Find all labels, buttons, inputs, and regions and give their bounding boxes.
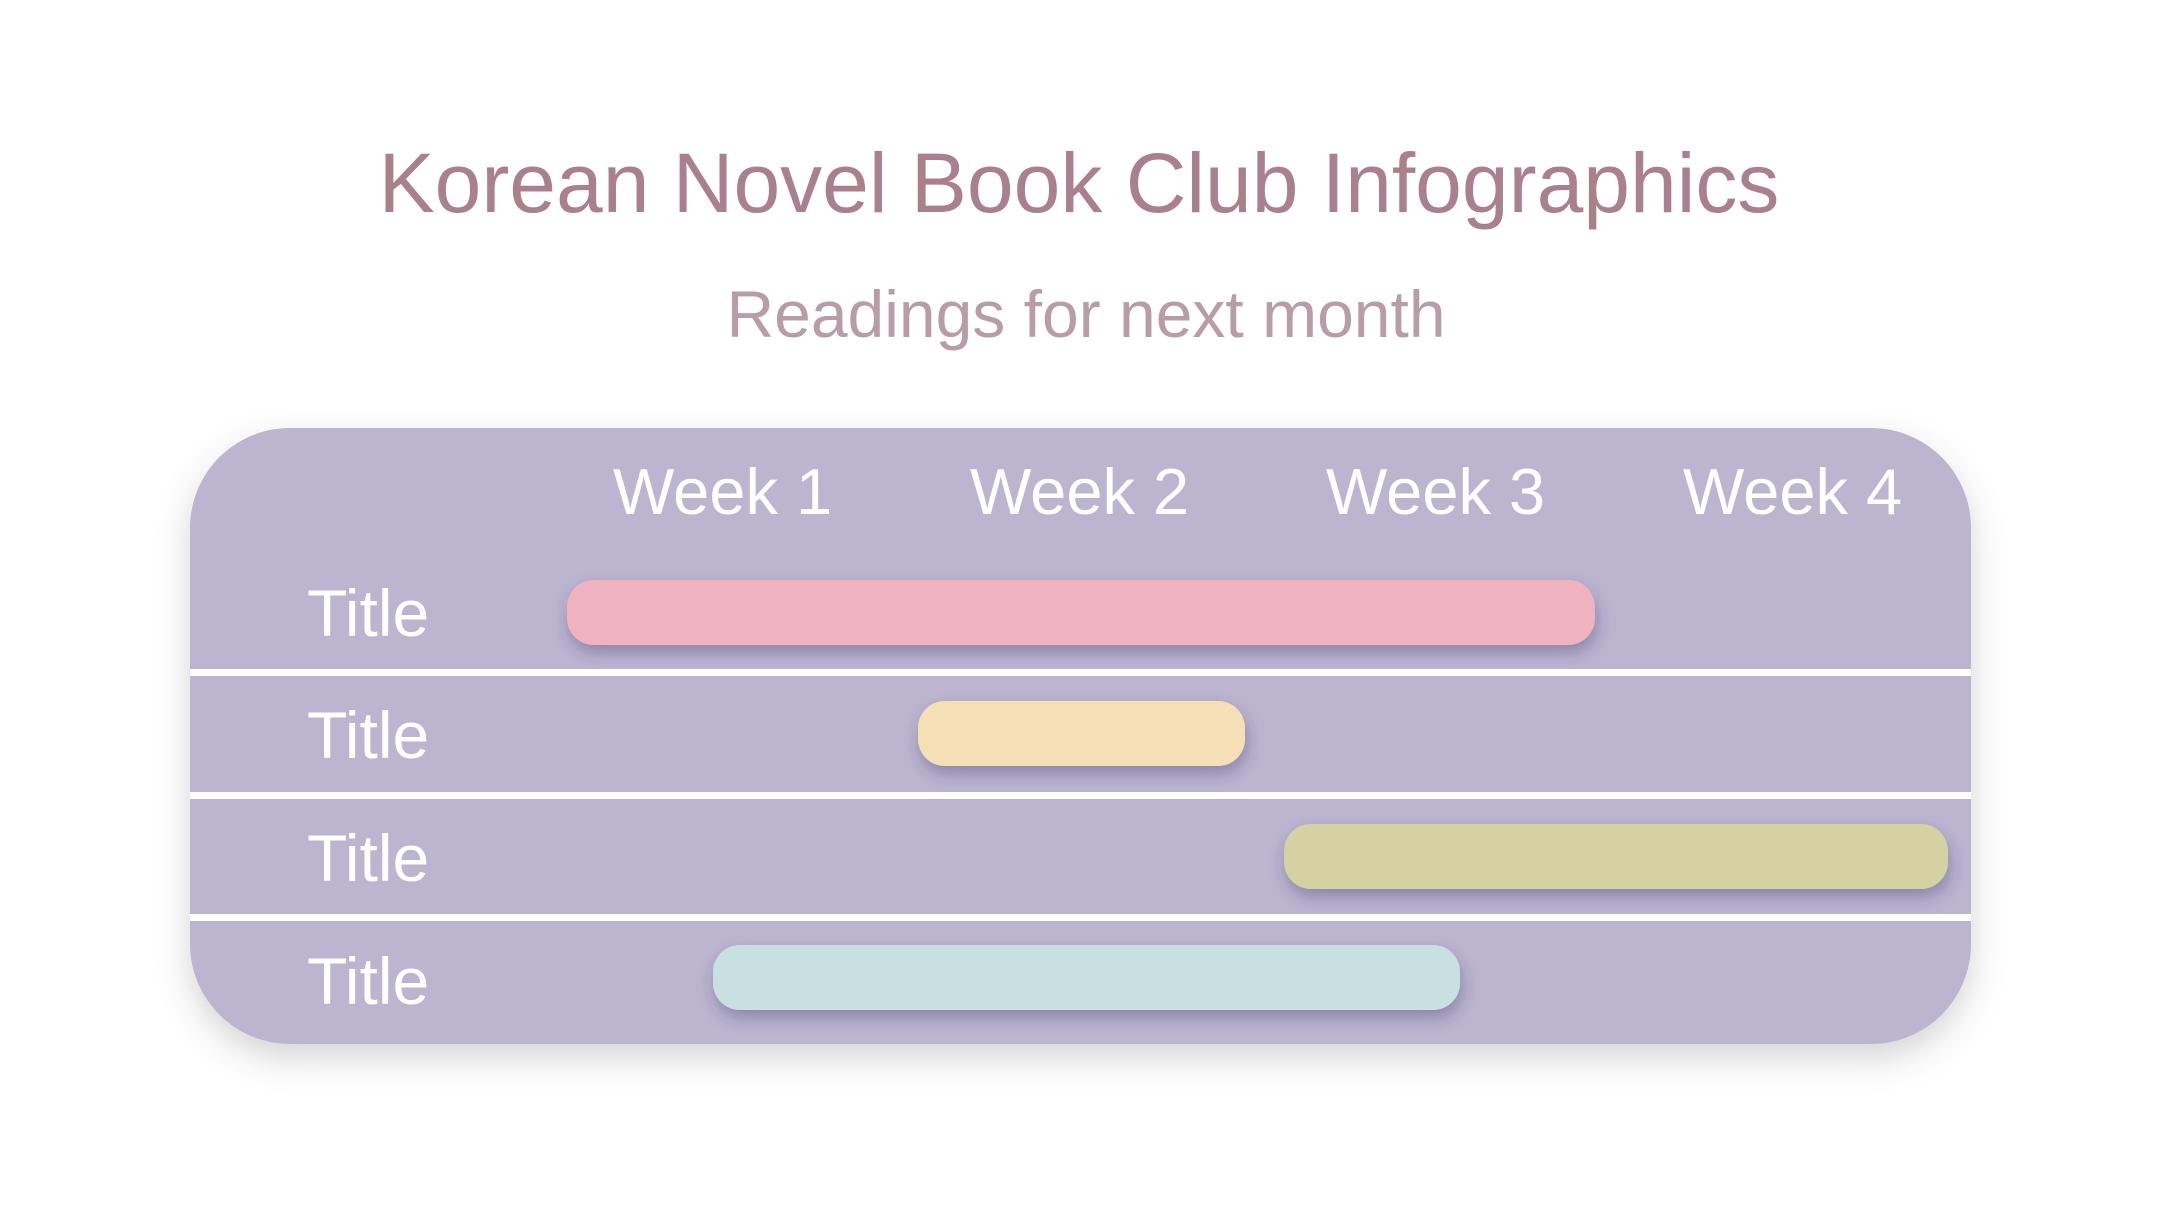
row labels <box>307 576 429 1018</box>
week headers: Week 4 <box>1683 455 1902 528</box>
row labels: Title <box>307 944 429 1018</box>
row labels: Title <box>307 698 429 772</box>
title: Korean Novel Book Club Infographics <box>379 136 1779 230</box>
week headers: Week 3 <box>1326 455 1545 528</box>
row labels: Title <box>307 576 429 650</box>
week headers: Week 1 <box>613 455 832 528</box>
panel background <box>190 428 1971 1044</box>
week headers <box>613 455 1902 528</box>
bar: second title, week 2 <box>918 701 1245 766</box>
bar: third title, weeks 3 to 4 <box>1284 824 1948 889</box>
bar: first title, weeks 1 to 3 <box>567 580 1595 645</box>
bar: fourth title, weeks 1 to 3 <box>713 945 1460 1010</box>
row labels: Title <box>307 821 429 895</box>
subtitle: Readings for next month <box>726 277 1446 351</box>
panel: schedule table <box>190 428 1971 1044</box>
week headers: Week 2 <box>970 455 1189 528</box>
